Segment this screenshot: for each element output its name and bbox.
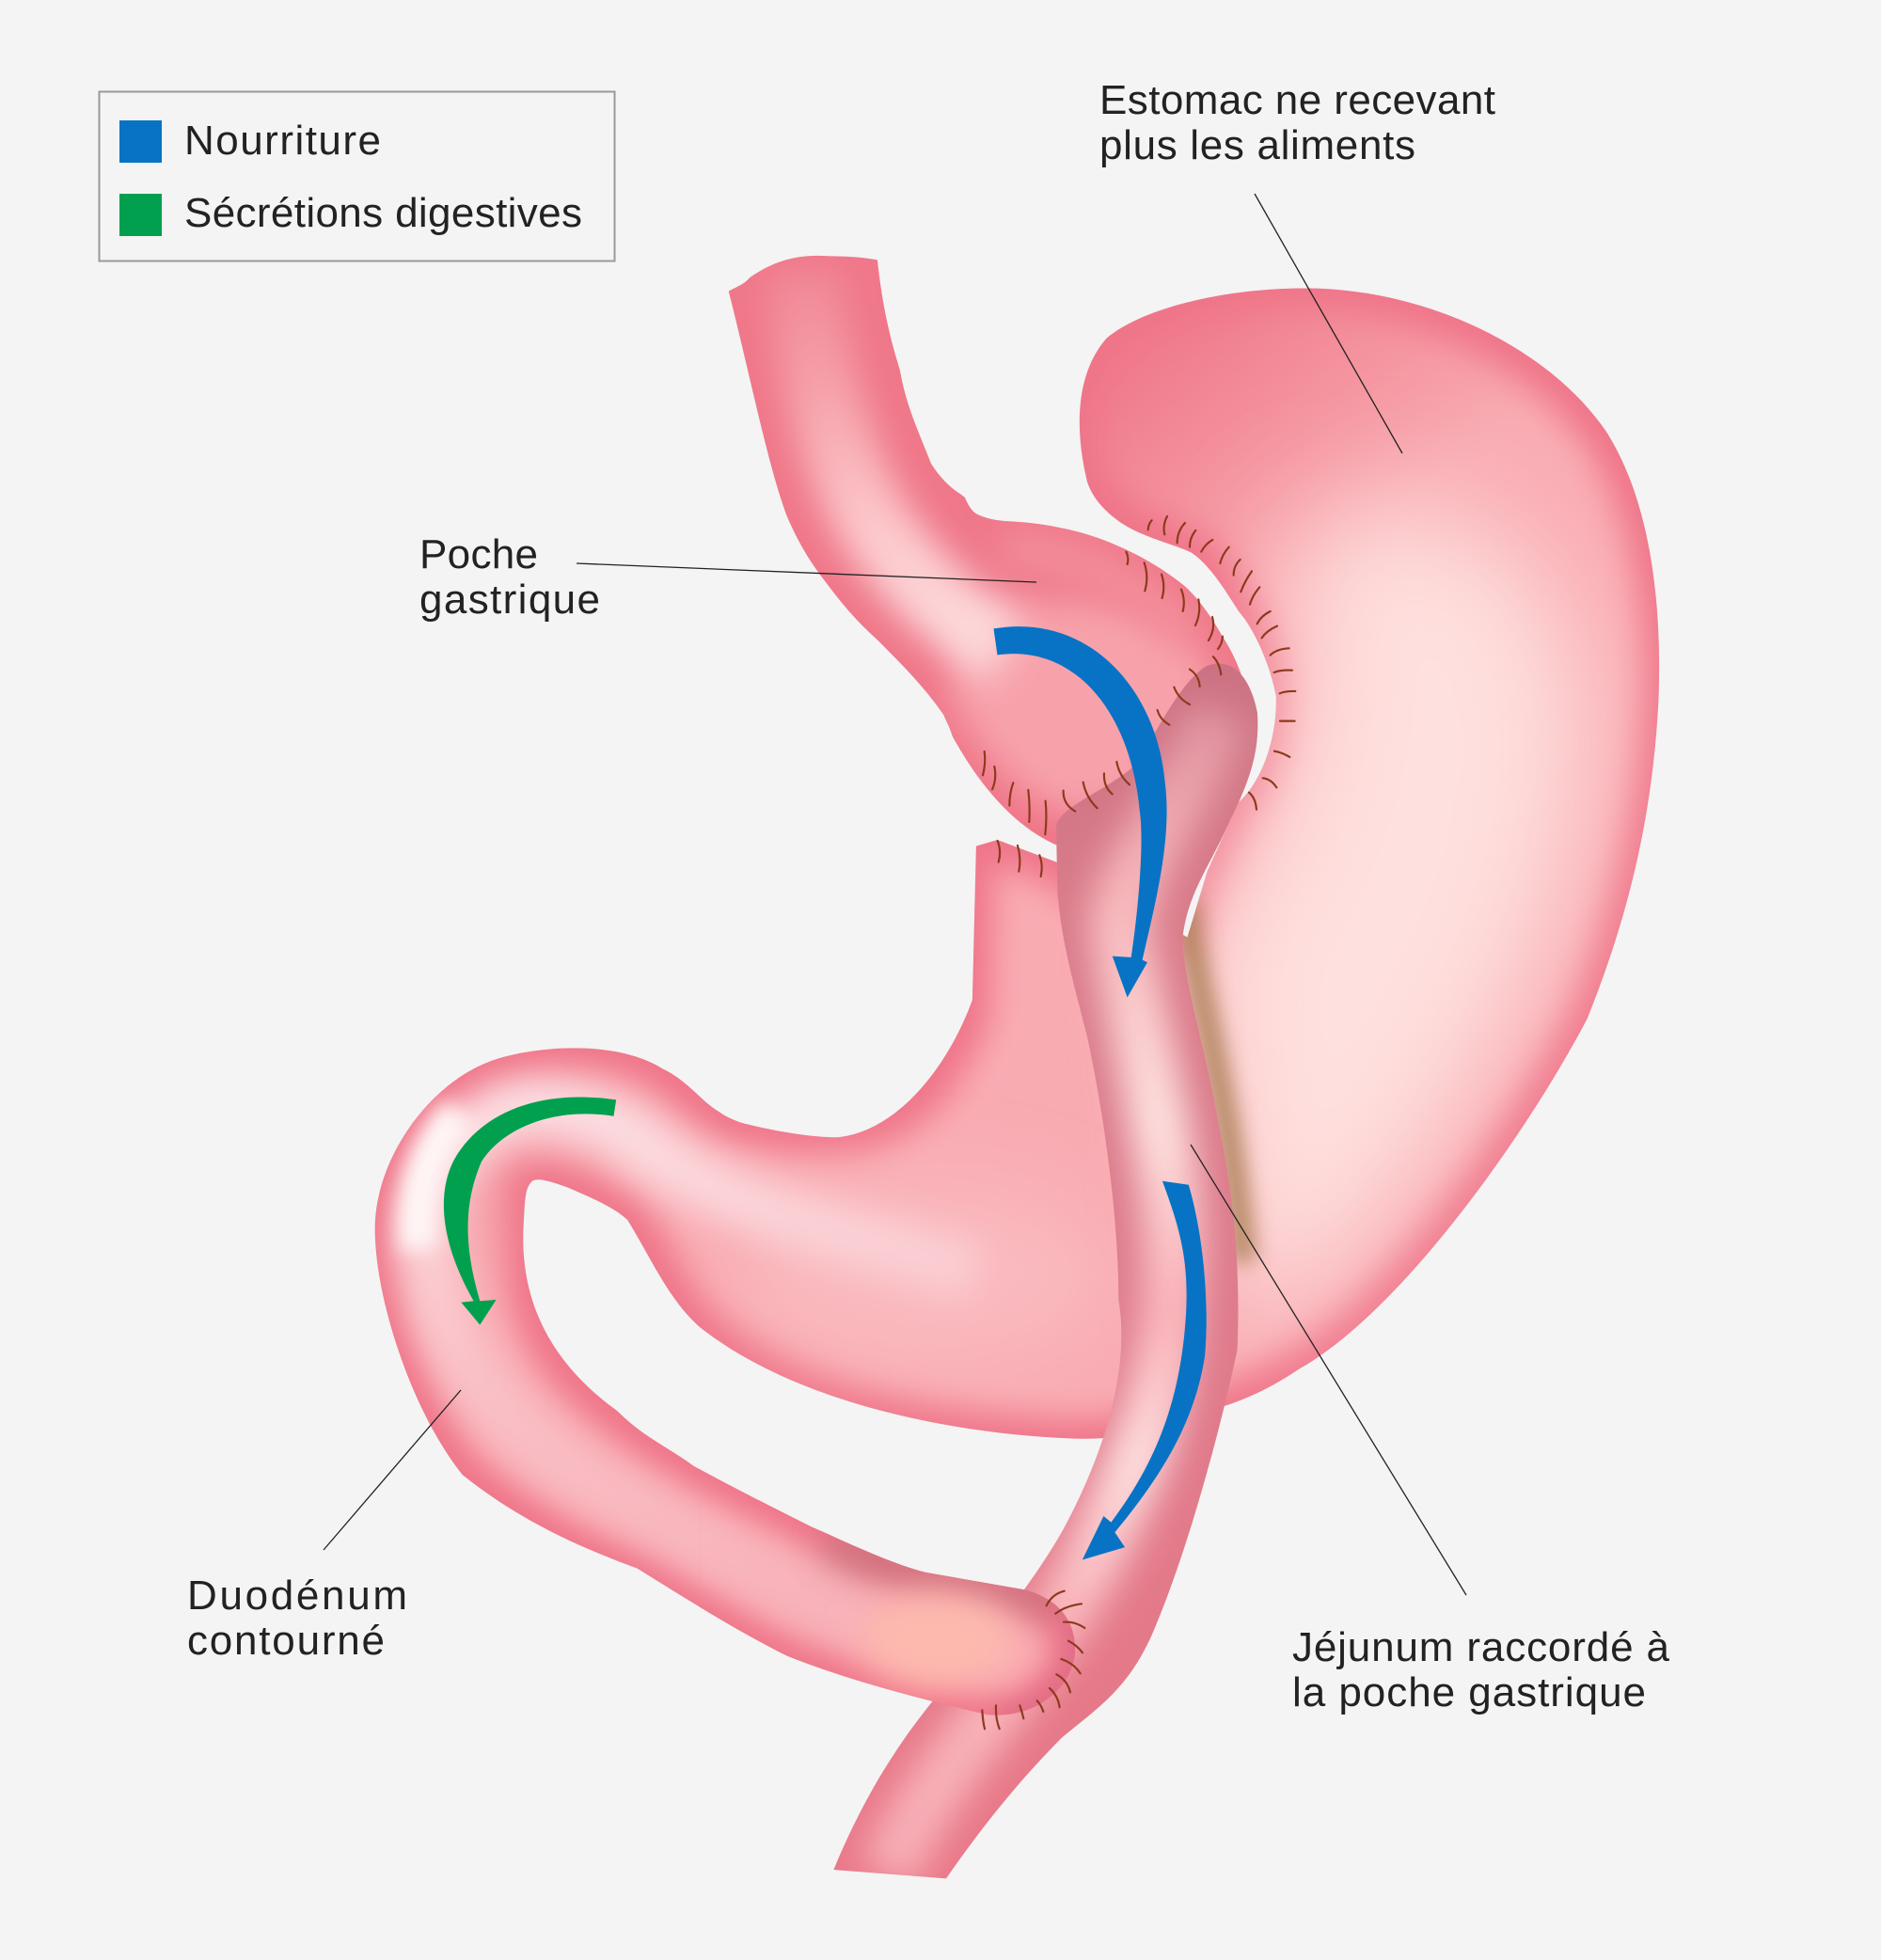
stomach illustration [375, 256, 1659, 1878]
leader line: poche gastrique [577, 563, 1036, 582]
label: estomac ne recevant plus les aliments: Estomac ne recevant [1099, 77, 1495, 123]
label: duodénum contourné: Duodénum [187, 1573, 407, 1619]
leader line: estomac [1255, 194, 1402, 453]
sutures: stomach and pouch [983, 516, 1295, 877]
arrow: food in jejunum [1083, 1181, 1207, 1559]
gastric pouch and esophagus [729, 256, 1243, 845]
leader line: duodénum [324, 1390, 461, 1550]
legend swatch: sécrétions digestives [119, 194, 162, 236]
label: jéjunum raccordé à la poche gastrique: la poche gastrique [1292, 1669, 1646, 1715]
label: poche gastrique: gastrique [419, 577, 600, 623]
arrow: food in pouch [993, 626, 1167, 997]
label: duodénum contourné [187, 1573, 407, 1664]
excluded stomach and duodenum [375, 289, 1659, 1722]
label: duodénum contourné: contourné [187, 1618, 385, 1664]
sutures: duodenum end [982, 1591, 1084, 1729]
legend label: sécrétions digestives: Sécrétions digestives [184, 190, 582, 236]
jejunum [833, 663, 1257, 1878]
duodenum end over jejunum [700, 1499, 1076, 1715]
legend [100, 92, 615, 261]
label: jéjunum raccordé à la poche gastrique [1292, 1624, 1670, 1715]
label: estomac ne recevant plus les aliments: plus les aliments [1099, 122, 1415, 168]
leader line: jéjunum [1191, 1145, 1466, 1595]
legend swatch: nourriture [119, 120, 162, 163]
label: poche gastrique [419, 531, 600, 623]
label: poche gastrique: Poche [419, 531, 538, 577]
arrow: digestive secretions [444, 1097, 616, 1325]
label: estomac ne recevant plus les aliments [1099, 77, 1495, 168]
legend label: nourriture: Nourriture [184, 118, 381, 164]
label: jéjunum raccordé à la poche gastrique: Jéjunum raccordé à [1292, 1624, 1670, 1670]
